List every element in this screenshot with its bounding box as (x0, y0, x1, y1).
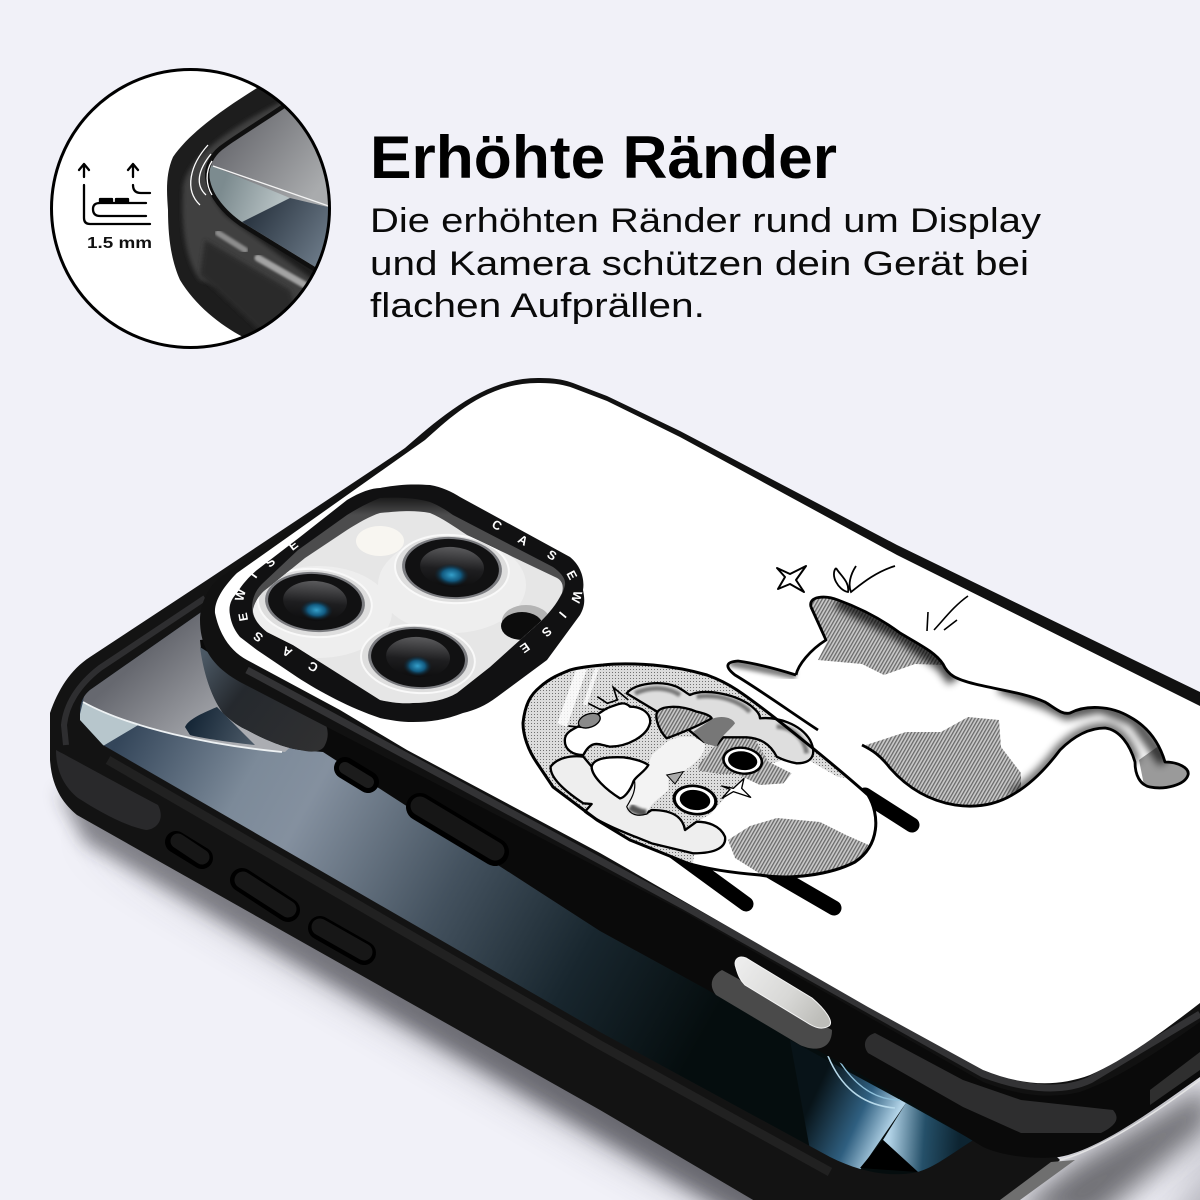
ring brand text: E (563, 568, 580, 582)
drop shadow of lower phone (70, 830, 1200, 1200)
circle outline (52, 70, 330, 348)
impact arcs (191, 145, 212, 205)
mirror cat face (551, 683, 813, 853)
ear upper (656, 707, 712, 738)
ear lower (592, 757, 648, 798)
carbon bumper patch (56, 750, 161, 830)
lens bottom (359, 621, 477, 697)
glass plate shading (478, 540, 512, 556)
wallpaper navy shape (185, 707, 255, 745)
camera corner bumper (200, 647, 328, 752)
microphone hole (502, 605, 550, 637)
ring brand text: S (539, 624, 554, 640)
eye top (720, 744, 765, 777)
ring brand text: C (489, 517, 504, 534)
circle fill (52, 70, 330, 348)
face centre fur (627, 737, 705, 815)
paw (565, 703, 650, 755)
inset sheen highlights (218, 233, 245, 250)
wallpaper grey sky (83, 612, 289, 752)
motion marks (927, 596, 968, 631)
raised edge diagram (79, 164, 150, 224)
sparkle (777, 566, 806, 592)
eye hatch patch (698, 737, 792, 785)
grass marks (834, 566, 895, 592)
ring brand text: S (263, 554, 278, 570)
wallpaper bottom glow (790, 1040, 906, 1170)
lighter band (181, 102, 310, 300)
screen (80, 612, 972, 1174)
paw claws (568, 687, 628, 727)
black camera ring (229, 484, 584, 722)
side buttons (176, 842, 202, 858)
lens left (256, 565, 374, 641)
body text: flachen Aufprällen. (370, 287, 705, 325)
mirror glare stripes (562, 668, 582, 725)
sparkle on face (722, 778, 751, 798)
magnified case corner (167, 88, 328, 336)
ring brand text: I (556, 609, 569, 621)
case body (50, 425, 1060, 1200)
lens top (393, 531, 511, 607)
upper phone side wall (200, 620, 1200, 1158)
measure label: 1.5 mm (87, 235, 152, 252)
body text (370, 202, 1042, 325)
forehead shade (693, 717, 735, 747)
ring brand text: E (286, 537, 301, 553)
ring brand text: E (236, 612, 251, 622)
ring brand text: W (232, 587, 249, 603)
real cat outline (728, 597, 1188, 806)
ring inner wall (252, 498, 565, 703)
body text: und Kamera schützen dein Gerät bei (370, 245, 1029, 283)
upper phone case back (200, 378, 1200, 1096)
camera module (229, 484, 585, 722)
ring brand text: S (251, 628, 266, 645)
black rim (200, 378, 1200, 1096)
white back (215, 383, 1200, 1083)
lower face hatch spot (728, 818, 869, 876)
cloud shading (635, 688, 807, 753)
pale lower face (710, 760, 838, 814)
ring brand text: I (247, 570, 260, 581)
top fur cloud (627, 683, 813, 763)
eye bottom (670, 782, 720, 818)
cat illustration (500, 566, 1190, 908)
long side button (420, 807, 495, 852)
mirror background stipple (524, 666, 846, 863)
mirror egg fill (523, 664, 876, 877)
white edge line (1060, 1080, 1200, 1160)
case rim highlight (64, 598, 205, 745)
mirror egg outline (523, 664, 876, 877)
real cat body (728, 597, 1188, 806)
cat legs (672, 795, 912, 908)
right corner bumper (1150, 1052, 1200, 1105)
ring brand text: A (280, 643, 295, 660)
rim highlight (247, 670, 1200, 1088)
ring brand text: A (515, 532, 530, 549)
shadow edge near phone (58, 790, 900, 1200)
ring brand text: S (544, 547, 559, 564)
ring brand text: E (517, 639, 532, 656)
inset screen (210, 108, 328, 267)
ring brand text: W (568, 589, 585, 605)
grey corner underside (1000, 1160, 1075, 1200)
wallpaper white line (83, 702, 282, 752)
inset screen rim (210, 108, 317, 268)
charging port (712, 957, 832, 1049)
cat markings and shading (730, 595, 1190, 810)
ring brand text (232, 517, 585, 675)
left fur cloud (551, 756, 725, 853)
microphone slot (345, 768, 368, 782)
wallpaper pale band (78, 702, 140, 746)
side wall body (200, 620, 1200, 1158)
shadow lower right (1010, 1082, 1200, 1200)
lower phone in case (50, 425, 1060, 1200)
bottom corner carbon bumper (865, 1033, 1117, 1133)
inset detail circle (52, 60, 350, 348)
heading: Erhöhte Ränder (370, 124, 837, 191)
body text: Die erhöhten Ränder rund um Display (370, 202, 1042, 240)
ring brand text: C (306, 658, 321, 675)
lens bay (253, 511, 563, 704)
flash (356, 526, 404, 556)
